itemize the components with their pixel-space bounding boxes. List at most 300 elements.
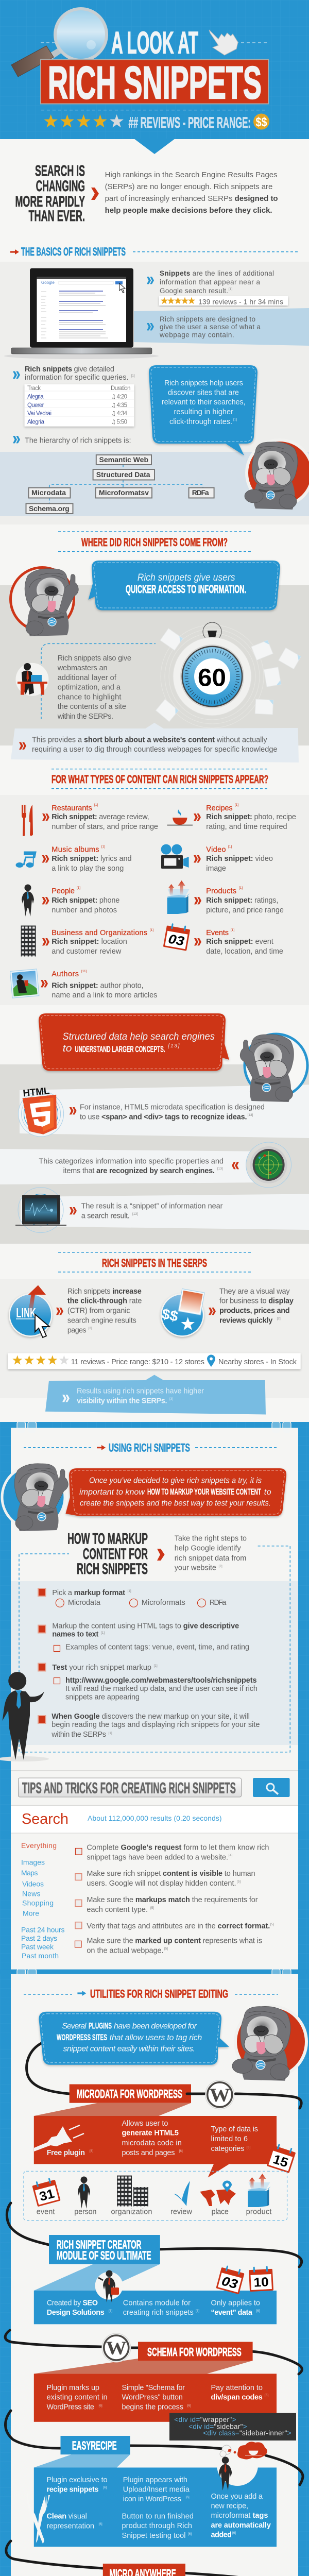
plugin: easyrecipe: representation [46, 2522, 94, 2530]
text: result is a snippet: [13] [132, 1212, 138, 1216]
intro text [105, 171, 278, 215]
icon: link badge: LINK [16, 1306, 36, 1320]
track table example: 5:50 [116, 419, 127, 426]
plugin: easyrecipe: Button to run finished [122, 2512, 194, 2520]
track table example: ♫ [111, 393, 116, 400]
track table example: ♫ [111, 410, 116, 417]
icon: dog mascot red circle [245, 440, 309, 510]
text: additional optimization: additional layer of [58, 674, 117, 682]
content type: products: Rich snippet: ratings, [206, 896, 278, 905]
text: result is a snippet [70, 1202, 223, 1221]
callout: quicker access [89, 561, 280, 610]
intro heading: SEARCH IS [35, 163, 85, 180]
track table example: ♫ [111, 401, 116, 409]
tips checklist: [5] [150, 1906, 154, 1910]
plugin: easyrecipe: [6] [99, 2522, 102, 2526]
code sample: <div id="wrapper"> [174, 2416, 236, 2424]
tips checklist: users. Google will not display hidden content. [87, 1879, 236, 1888]
heading: the basics of rich snippets [10, 245, 299, 258]
callout: discover relevant sites: relevant to their searches, [162, 398, 245, 406]
content type: events: [1] [231, 928, 234, 932]
text: visual way for business [209, 1287, 294, 1325]
divider bar [0, 1970, 309, 1974]
tips checklist: on the actual webpage. [87, 1947, 164, 1955]
example snippet with stars: 139 reviews - 1 hr 34 mins [198, 298, 283, 306]
content type: music albums: Music albums [52, 846, 99, 854]
step: pick a markup format: RDFa [210, 1599, 227, 1607]
content type: authors [10, 969, 157, 999]
callout: structured data: Structured data help search engines [62, 1031, 215, 1042]
category labels: person [74, 2208, 97, 2216]
plugin: easyrecipe: icon in WordPress [123, 2495, 181, 2503]
tips checklist: Verify that tags and attributes are in the correct format. [87, 1922, 270, 1930]
callout: wordpress plugins: snippet content easily within their sites. [63, 2045, 195, 2054]
heading: how to markup content: RICH SNIPPETS [77, 1561, 148, 1578]
sidebar navigation: Videos [22, 1879, 44, 1888]
intro text: High rankings in the Search Engine Results Pages [105, 171, 278, 179]
sidebar navigation: Past week [21, 1943, 54, 1951]
content type: business and organizations: and customer review [52, 947, 122, 956]
tips checklist: [5] [270, 1923, 274, 1926]
heading: the basics of rich snippets: THE BASICS OF RICH SNIPPETS [21, 245, 126, 258]
text: increase click-through rate: pages [67, 1326, 87, 1334]
content type: people [22, 884, 119, 917]
icon: wordpress logo [102, 2333, 131, 2362]
text: snippets definition: information that appear near a [160, 278, 260, 286]
text: additional optimization: Rich snippets also give [58, 654, 131, 663]
plugin: easyrecipe: microformat tags [211, 2512, 268, 2520]
plugin: rich snippet creator: [6] [109, 2309, 112, 2313]
intro heading: THAN EVER. [29, 208, 85, 225]
plugin: easyrecipe: Plugin exclusive to [46, 2476, 108, 2484]
icon: calendar 03: 03 [220, 2274, 239, 2292]
plugin: microdata for wordpress: categories [211, 2145, 244, 2153]
callout: discover relevant sites [149, 365, 258, 455]
content type: music albums: [1] [101, 845, 105, 849]
text: snippets definition: Snippets are the lines of additional [160, 269, 274, 277]
content type: events: Rich snippet: event [206, 938, 273, 946]
text: increase click-through rate: the click-through rate [67, 1297, 142, 1306]
icon: white plug [34, 2125, 84, 2151]
title: a look at: A LOOK AT [111, 26, 198, 60]
icon: monitor with pulse [15, 1188, 66, 1233]
callout: structured data [39, 1013, 229, 1071]
heading: for what types of content [52, 769, 268, 789]
plugin: rich snippet creator: [6] [196, 2309, 199, 2313]
icon: dollar coin: $$ [255, 115, 267, 129]
callout: how to markup: create the snippets and the best way to test your results. [80, 1499, 271, 1508]
track table example: Querer [27, 402, 44, 409]
icon: dog mascot large [232, 2006, 306, 2081]
plugin: microdata for wordpress: [6] [179, 2149, 183, 2153]
chart: hierarchy of rich snippets: Microdata [31, 488, 66, 497]
callout: structured data: [13] [167, 1043, 180, 1049]
chart: hierarchy of rich snippets: Schema.org [29, 504, 70, 513]
category labels: organization [111, 2208, 152, 2216]
text: right steps: Take the right steps to [175, 1535, 247, 1543]
plugin: easyrecipe: [6] [103, 2486, 107, 2489]
code sample: <div class="sidebar-inner"> [203, 2429, 291, 2437]
icon: laptop with search results: Google [41, 280, 55, 285]
text: html5 microdata: to use <span> and <div> tags to recognize ideas. [80, 1113, 247, 1121]
content type: video: Rich snippet: video [206, 855, 273, 863]
plugin: easyrecipe: added [211, 2531, 232, 2539]
content type: business and organizations: Business and Organizations [52, 929, 147, 937]
step: markup the content: Markup the content using HTML tags to give descriptive [52, 1622, 239, 1630]
text: detailed information: information for specific queries. [25, 374, 129, 382]
text: recognized by search engines: items that are recognized by search engines. [63, 1167, 215, 1175]
callout band: higher visibility: [3] [169, 1397, 173, 1401]
dashed connector [41, 643, 156, 719]
icon: person [78, 2176, 90, 2209]
icon: calendar 03 [216, 2264, 245, 2294]
text: rich snippets purpose: webpage may contain. [159, 331, 234, 339]
step: markup the content: [1] [101, 1631, 105, 1635]
content type: events: Events [206, 929, 229, 937]
plugin: easyrecipe: [6] [188, 2532, 192, 2536]
track table example [25, 384, 134, 427]
plugin: microdata for wordpress: limited to 6 [211, 2135, 248, 2143]
text: hierarchy intro: The hierarchy of rich snippets is: [25, 437, 131, 445]
text: detailed information: [1] [131, 374, 135, 378]
heading: rich snippets in the serps [58, 1252, 251, 1272]
chart: hierarchy of rich snippets: Semantic Web [99, 455, 148, 464]
callout: structured data: UNDERSTAND LARGER CONCEPTS. [75, 1044, 165, 1054]
content type: recipes: Recipes [206, 804, 233, 812]
intro text: (SERPs) are no longer enough. Rich snippets are [105, 182, 272, 191]
content type: events: 03 [167, 931, 185, 948]
step: pick a markup format: Pick a markup format [52, 1589, 125, 1597]
sidebar navigation: More [23, 1909, 39, 1917]
callout band: higher visibility: Results using rich snippets have higher [77, 1387, 204, 1396]
track table example: Alegria [27, 394, 44, 400]
text: additional optimization: optimization, and a [58, 683, 121, 691]
paper clips [17, 1968, 291, 1980]
step: when google discovers: [1] [108, 1732, 112, 1735]
content type: authors: Rich snippet: author photo, [52, 982, 144, 990]
callout: discover relevant sites: discover sites that are [168, 388, 239, 397]
step: pick a markup format [52, 1589, 227, 1607]
content type: recipes: Rich snippet: photo, recipe [206, 813, 296, 821]
plugin: schema for wordpress [34, 2342, 277, 2422]
content type: business and organizations: Rich snippet: location [52, 938, 127, 946]
text: snippets definition: [1] [229, 287, 232, 291]
category labels: event [37, 2208, 55, 2216]
icon: stopwatch 60 seconds [161, 622, 264, 728]
plugin: rich snippet creator: Design Solutions [47, 2309, 105, 2317]
callout band: short blurb: requiring a user to dig through countless webpages for specific knowledge [32, 745, 277, 754]
callout: how to markup: Once you've decided to give rich snippets a try, it is [89, 1477, 262, 1485]
sidebar navigation [21, 1841, 65, 1960]
plugin: rich snippet creator: RICH SNIPPET CREATOR [57, 2238, 142, 2251]
plugin: microdata for wordpress: Allows user to [122, 2120, 168, 2128]
heading: how to markup content [67, 1530, 148, 1578]
text: additional optimization [57, 654, 131, 721]
content type: products: picture, and price range [206, 906, 284, 914]
content type: music albums: a link to play the song [52, 865, 124, 873]
text bands: html5 radar monitor [0, 1084, 309, 1230]
track table example: Duration [111, 385, 131, 392]
icon: calendar 10: 10 [253, 2275, 269, 2290]
plugin: microdata for wordpress: Free plugin [47, 2149, 85, 2157]
content type: restaurants [22, 803, 158, 836]
step: when google discovers: begin reading the tags and displaying rich snippets for your site [52, 1721, 260, 1729]
text: visual way for business: reviews quickly [219, 1316, 272, 1325]
cable part five [5, 2411, 303, 2485]
step: test your markup: http://www.google.com/webmasters/tools/richsnippets [65, 1676, 257, 1685]
icon: businessman with briefcase [95, 2270, 123, 2302]
tips checklist: Complete Google's request form to let them know rich [87, 1844, 269, 1852]
callout: discover relevant sites: Rich snippets help users [164, 379, 243, 387]
icon: price and photo badge: $$ [160, 1306, 180, 1325]
heading: rich snippets in the serps: RICH SNIPPETS IN THE SERPS [102, 1257, 207, 1269]
content type: recipes: rating, and time required [206, 823, 287, 831]
track table example: ♫ [111, 418, 116, 426]
callout: discover relevant sites: click-through rates. [169, 418, 232, 426]
heading: where did rich snippets come from [58, 532, 251, 551]
icon: white knife and fork [27, 2490, 50, 2544]
chart: hierarchy of rich snippets [26, 455, 214, 514]
plugin: rich snippet creator: [6] [256, 2309, 260, 2313]
icon: calendar 10 [249, 2266, 273, 2292]
plugin: rich snippet creator: “event” data [211, 2309, 253, 2317]
text: snippets definition [147, 269, 274, 295]
content type: products: [1] [239, 886, 243, 890]
icon: price and photo badge [160, 1289, 204, 1336]
plugin: microdata for wordpress: Type of data is [211, 2125, 258, 2133]
plugin: schema for wordpress: [6] [99, 2404, 102, 2408]
text: recognized by search engines: [13] [217, 1167, 223, 1171]
text: additional optimization: chance to highlight [58, 693, 121, 702]
content type: people: [1] [77, 886, 80, 890]
example snippet bar: 11 reviews - Price range: $210 - 12 stores [71, 1358, 204, 1366]
callout: wordpress plugins: that allow users to tag rich [110, 2033, 202, 2042]
sidebar navigation: Everything [21, 1841, 57, 1850]
sidebar navigation: Past 24 hours [21, 1926, 65, 1934]
code sample: <div id="sidebar"> [188, 2422, 247, 2430]
plugin: schema for wordpress: SCHEMA FOR WORDPRESS [147, 2345, 242, 2359]
text: increase click-through rate: Rich snippets increase [67, 1287, 142, 1296]
plugin: easyrecipe: Clean visual [46, 2512, 87, 2520]
plugin: easyrecipe: Upload/Insert media [123, 2486, 190, 2494]
intro text: help people make decisions before they click. [105, 206, 272, 215]
category labels: product [246, 2208, 271, 2216]
intro heading: CHANGING [36, 178, 85, 195]
text: html5 microdata [70, 1104, 265, 1121]
callout: wordpress plugins: WORDPRESS SITES [57, 2032, 107, 2042]
sidebar navigation: Images [21, 1858, 45, 1866]
step: when google discovers: When Google discovers the new markup on your site, it will [52, 1713, 250, 1721]
plugin: easyrecipe: new recipe, [211, 2502, 248, 2510]
rating stars [44, 114, 124, 127]
tips checklist [75, 1844, 274, 1955]
callout: discover relevant sites: resulting in higher [174, 408, 233, 416]
content type: people: number and photos [52, 906, 117, 914]
text: increase click-through rate: [2] [89, 1327, 92, 1330]
intro heading [15, 163, 85, 225]
callout band: short blurb: This provides a short blurb about a website's content without actually [32, 736, 267, 744]
text: visual way for business: [2] [277, 1317, 281, 1320]
plugin: rich snippet creator: creating rich snippets [123, 2309, 194, 2317]
sidebar navigation: Past 2 days [21, 1934, 57, 1942]
example snippet bar [8, 1353, 301, 1369]
text: visual way for business: products, prices and [219, 1307, 290, 1315]
plugin: easyrecipe: Snippet testing tool [122, 2532, 185, 2540]
text: snippets definition: Google search result. [160, 287, 228, 295]
chart: hierarchy of rich snippets: RDFa [192, 488, 209, 497]
plugin: easyrecipe: are automatically [211, 2521, 271, 2530]
text: increase click-through rate: search engine results [67, 1316, 136, 1325]
code sample [169, 2413, 296, 2441]
cable part two [187, 2094, 301, 2108]
plugin: easyrecipe: [6] [232, 2531, 236, 2535]
heading: using rich snippets: USING RICH SNIPPETS [109, 1442, 190, 1454]
step: test your markup: snippets are appearing [65, 1693, 140, 1701]
content type: events: date, location, and time [206, 947, 283, 956]
icon: flying paper sheets [156, 629, 301, 722]
text: additional optimization: within the SERPs. [57, 713, 113, 721]
content type: authors: [11] [81, 970, 87, 973]
callout: wordpress plugins: have been developed for [114, 2022, 197, 2031]
callout band: short blurb [11, 723, 299, 762]
plugin: microdata for wordpress: generate HTML5 [122, 2129, 179, 2138]
plugin: microdata for wordpress: [6] [90, 2149, 93, 2153]
icon: organization buildings [117, 2176, 148, 2207]
plugin: rich snippet creator: MODULE OF SEO ULTIMATE [57, 2249, 151, 2262]
data categories panel [24, 2171, 287, 2221]
plugin: schema for wordpress: [6] [265, 2394, 268, 2397]
icon: html5 logo: HTML [23, 1086, 50, 1099]
category labels: place [212, 2208, 229, 2216]
content type: business and organizations [21, 925, 153, 956]
tips checklist: [5] [237, 1880, 241, 1884]
text: increase click-through rate: (CTR) from organic [67, 1307, 130, 1315]
panel: basics blue band [134, 308, 309, 346]
step: pick a markup format: Microdata [68, 1599, 101, 1607]
cable part four [5, 2330, 302, 2374]
content type: music albums [15, 845, 132, 873]
icon: red chevron [157, 1549, 165, 1561]
icon: place map and pin [200, 2180, 236, 2206]
plugin: schema for wordpress: Pay attention to [211, 2384, 263, 2392]
plugin: rich snippet creator [34, 2235, 277, 2324]
example snippet with stars [159, 296, 288, 306]
track table example: Track [27, 385, 41, 392]
icon: dog mascot thumb up [10, 568, 78, 636]
plugin: easyrecipe: Once you add a [211, 2493, 263, 2501]
tips checklist: [5] [164, 1947, 168, 1951]
plugin: microdata for wordpress [34, 2084, 297, 2177]
plugin: microdata for wordpress: posts and pages [122, 2149, 175, 2157]
intro text: part of increasingly enhanced SERPs designed to [105, 194, 278, 203]
content type: music albums: Rich snippet: lyrics and [52, 855, 132, 863]
icon: radar [246, 1142, 291, 1188]
plugin: schema for wordpress: Simple "Schema for [122, 2384, 185, 2392]
step: markup the content: Examples of content tags: venue, event, time, and rating [65, 1643, 249, 1652]
plugin: easyrecipe: EASYRECIPE [72, 2439, 117, 2452]
text: right steps: [7] [218, 1565, 222, 1568]
content type: video: image [206, 865, 226, 873]
cable part six [6, 2541, 303, 2576]
callout: wordpress plugins: Several [62, 2022, 87, 2031]
step: when google discovers: within the SERPs [51, 1731, 106, 1739]
text: right steps: your website [175, 1564, 216, 1572]
icon: red chevron [91, 188, 99, 200]
chart: hierarchy of rich snippets: Microformatsv [99, 488, 149, 497]
plugin: schema for wordpress: begins the process [122, 2403, 183, 2412]
text: increase click-through rate [56, 1287, 142, 1334]
panel: markup checklist [11, 1546, 298, 1752]
text: html5 microdata: [13] [247, 1113, 253, 1117]
heading: using rich snippets [24, 1442, 278, 1454]
plugin: schema for wordpress: existing content in [46, 2394, 108, 2402]
plugin: microdata for wordpress: MICRODATA FOR WORDPRESS [77, 2087, 182, 2100]
icon: calendar 15 [267, 2142, 297, 2173]
sidebar navigation: News [22, 1890, 40, 1898]
icon: chef thinking of food [217, 2442, 267, 2490]
content type: products [167, 880, 284, 914]
results row [11, 1806, 298, 1833]
plugin: schema for wordpress: div/span codes [211, 2394, 263, 2402]
icon: review check [174, 2181, 190, 2206]
icon: hand pointer [209, 30, 238, 55]
text: detailed information: Rich snippets give detailed [25, 365, 114, 374]
plugin: schema for wordpress: WordPress" button [122, 2394, 183, 2402]
content type: restaurants: [1] [94, 803, 98, 807]
plugin: easyrecipe: product through Rich [122, 2522, 192, 2530]
search bar: tips and tricks [11, 1771, 298, 1805]
sidebar navigation: Shopping [22, 1899, 54, 1907]
track table example: 4:35 [116, 402, 127, 409]
step: test your markup: [1] [153, 1664, 158, 1668]
icon: link badge [9, 1285, 52, 1337]
icon: dog mascot blue circle [2, 1464, 68, 1531]
step: when google discovers [51, 1713, 260, 1739]
results row: Search [22, 1811, 68, 1827]
content type: restaurants: Restaurants [52, 804, 92, 812]
plugin: microdata for wordpress: [6] [247, 2146, 250, 2149]
heading: utilities: UTILITIES FOR RICH SNIPPET EDITING [90, 1987, 228, 2000]
icon: calendar 15: 15 [271, 2152, 290, 2171]
plugin: schema for wordpress: WordPress site [46, 2403, 94, 2412]
content type: business and organizations: [1] [150, 928, 153, 932]
content type: products: Products [206, 887, 236, 895]
plugin: schema for wordpress: [6] [187, 2404, 191, 2408]
example snippet bar: Nearby stores - In Stock [218, 1358, 297, 1366]
icon: dog mascot blue ring [240, 1034, 307, 1102]
icon: laptop with search results [4, 268, 159, 359]
plugin: rich snippet creator: Contains module for [123, 2299, 191, 2307]
step: test your markup: It will read the marked up data, and the user can see if rich [65, 1685, 258, 1693]
step: markup the content [52, 1622, 249, 1652]
text: right steps [175, 1535, 247, 1572]
callout: structured data: to [63, 1043, 72, 1054]
content type: video: [1] [228, 845, 232, 849]
step: pick a markup format: [1] [128, 1589, 131, 1593]
plugin: micro anywhere [34, 2564, 277, 2576]
step: test your markup: Test your rich snippet markup [52, 1664, 151, 1672]
tips checklist: Make sure the marked up content represents what is [87, 1937, 262, 1945]
results row: About 112,000,000 results (0.20 seconds) [88, 1814, 221, 1822]
intro heading: MORE RAPIDLY [15, 193, 85, 210]
text: result is a snippet: a search result. [81, 1212, 130, 1221]
icon: magnifying glass [11, 9, 107, 77]
step: markup the content: names to text [52, 1630, 99, 1638]
sidebar navigation: Past month [22, 1952, 59, 1960]
callout band: higher visibility [45, 1375, 266, 1415]
step: pick a markup format: Microformats [142, 1599, 185, 1607]
text: right steps: help Google identify [175, 1545, 241, 1553]
